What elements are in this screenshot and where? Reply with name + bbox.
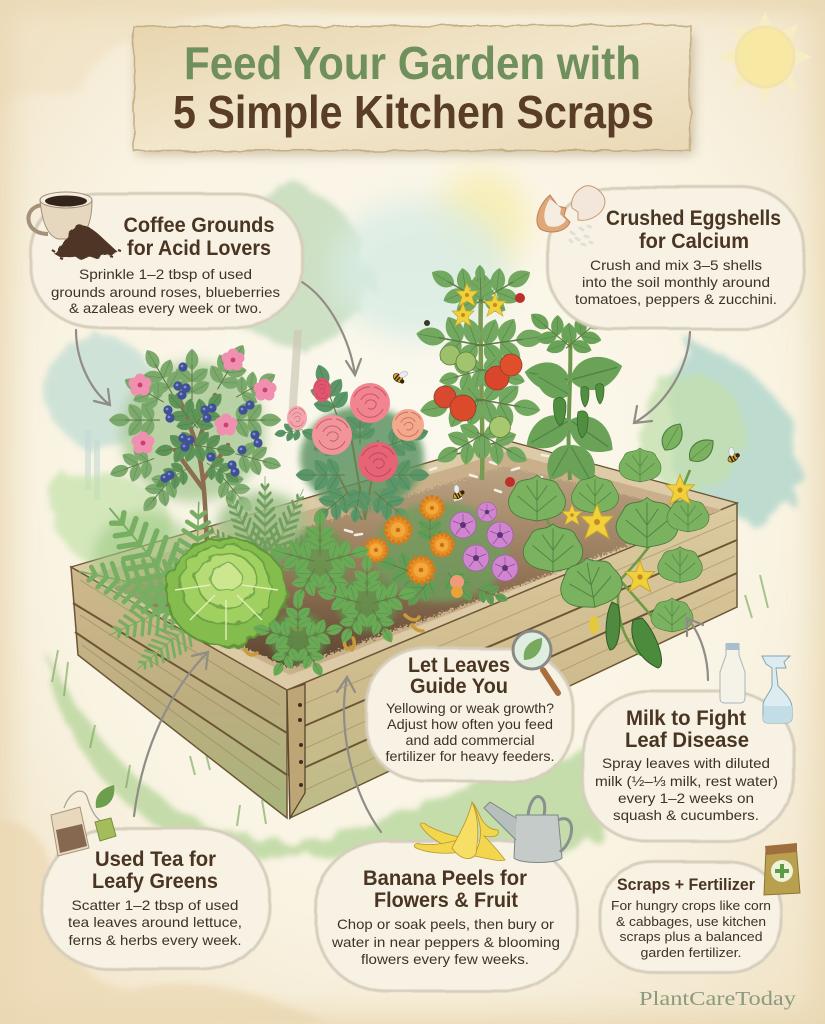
icon: magnifying glass bbox=[513, 631, 558, 693]
heading: banana peels: Banana Peels for bbox=[363, 867, 527, 890]
heading line two: Guide You bbox=[410, 675, 508, 698]
arrow: coffee to roses bbox=[302, 282, 361, 375]
sky glow bbox=[436, 170, 528, 270]
plant: marigolds and petunias bbox=[365, 497, 518, 615]
body: coffee grounds: Sprinkle 1–2 tbsp of used bbox=[79, 266, 252, 282]
body: banana peels bbox=[331, 916, 560, 967]
heading line two: Leaf Disease bbox=[625, 729, 749, 752]
body: banana peels: flowers every few weeks. bbox=[361, 951, 529, 967]
arrow: tea to lettuce bbox=[134, 652, 208, 816]
icon: spray bottle bbox=[762, 656, 792, 723]
bed left face bbox=[71, 567, 287, 818]
icon: watering can bbox=[484, 797, 572, 862]
plant: rose bush bbox=[273, 358, 434, 535]
heading: milk: Milk to Fight bbox=[626, 707, 746, 730]
icon: fertilizer bag bbox=[764, 843, 800, 895]
plant: cucumber vine bbox=[509, 420, 719, 668]
brand wordmark: PlantCareToday bbox=[639, 988, 796, 1010]
body: crushed eggshells bbox=[575, 257, 777, 307]
icon: milk bottle bbox=[720, 643, 745, 703]
body: coffee grounds bbox=[51, 266, 280, 316]
body: crushed eggshells: into the soil monthly around bbox=[582, 274, 770, 290]
body: scraps plus fertilizer: scraps plus a balanced bbox=[620, 929, 762, 944]
heading: scraps plus fertilizer: Scraps + Fertilizer bbox=[617, 875, 755, 894]
heading: crushed eggshells: Crushed Eggshells bbox=[606, 207, 781, 230]
plant: basil clusters bbox=[249, 509, 421, 683]
icon: coffee cup bbox=[28, 192, 121, 259]
title line two: 5 Simple Kitchen Scraps bbox=[173, 86, 654, 138]
body: scraps plus fertilizer bbox=[611, 898, 771, 960]
panel: scraps plus fertilizer bbox=[599, 843, 800, 973]
icon: banana peel bbox=[414, 802, 505, 861]
grass wash under bed bbox=[45, 575, 768, 857]
heading line two: Flowers & Fruit bbox=[374, 889, 518, 912]
body: banana peels: Chop or soak peels, then bury or bbox=[337, 916, 554, 932]
icon: sun bbox=[718, 12, 812, 102]
panel: crushed eggshells bbox=[537, 186, 804, 328]
body: let leaves bbox=[386, 700, 554, 764]
arrow: coffee to blueberry bbox=[76, 330, 110, 405]
watercolor background trees bbox=[49, 186, 800, 563]
panel: coffee grounds bbox=[28, 192, 303, 328]
panel: milk bbox=[582, 643, 793, 842]
body: scraps plus fertilizer: For hungry crops like corn bbox=[611, 898, 771, 913]
body: milk: every 1–2 weeks on bbox=[618, 790, 754, 806]
plant: blueberry and azalea tree bbox=[104, 335, 286, 545]
raised garden bed bbox=[71, 440, 737, 818]
plant: feathery herb bbox=[199, 477, 331, 578]
heading: used tea: Used Tea for bbox=[95, 848, 216, 871]
title line one: Feed Your Garden with bbox=[184, 37, 641, 89]
title banner bbox=[134, 25, 693, 154]
heading: coffee grounds: Coffee Grounds bbox=[124, 214, 274, 237]
heading line two: for Calcium bbox=[639, 230, 749, 253]
body: crushed eggshells: Crush and mix 3–5 shells bbox=[590, 257, 762, 273]
plant: pepper bbox=[518, 298, 626, 490]
body: let leaves: Yellowing or weak growth? bbox=[386, 700, 554, 716]
bed inner walls and soil bbox=[71, 440, 737, 690]
soil detail with eggshell and banana bits bbox=[245, 445, 554, 655]
heading: let leaves: Let Leaves bbox=[408, 654, 510, 677]
heading line two: Leafy Greens bbox=[92, 870, 218, 893]
body: let leaves: Adjust how often you feed bbox=[387, 716, 553, 732]
body: let leaves: and add commercial bbox=[406, 732, 534, 748]
body: coffee grounds: & azaleas every week or two. bbox=[69, 300, 262, 316]
heading line two: for Acid Lovers bbox=[127, 237, 271, 260]
body: milk bbox=[595, 755, 778, 823]
icon: eggshells bbox=[537, 186, 605, 245]
body: crushed eggshells: tomatoes, peppers & zucchini. bbox=[575, 291, 777, 307]
body: used tea bbox=[68, 897, 242, 948]
body: banana peels: water in near peppers & blooming bbox=[331, 934, 560, 950]
arrow: eggshells to pepper bbox=[634, 332, 690, 423]
body: milk: squash & cucumbers. bbox=[613, 807, 759, 823]
body: used tea: ferns & herbs every week. bbox=[68, 932, 242, 948]
arrow: banana to bed bbox=[337, 677, 381, 832]
plant: lettuce bbox=[166, 538, 286, 646]
plant: fern bbox=[74, 488, 225, 682]
icon: tea bag bbox=[51, 785, 116, 856]
body: used tea: Scatter 1–2 tbsp of used bbox=[72, 897, 238, 913]
bees and ladybugs bbox=[392, 293, 741, 500]
arrow: milk to cucumber bbox=[687, 618, 708, 680]
panel: used tea bbox=[41, 785, 269, 970]
body: used tea: tea leaves around lettuce, bbox=[68, 914, 242, 930]
bed right face bbox=[287, 503, 737, 818]
body: milk: milk (½–⅓ milk, rest water) bbox=[595, 773, 778, 789]
body: milk: Spray leaves with diluted bbox=[602, 755, 770, 771]
plant: tomato bbox=[411, 251, 548, 481]
body: scraps plus fertilizer: garden fertilizer. bbox=[640, 945, 742, 960]
body: coffee grounds: grounds around roses, blueberries bbox=[51, 284, 280, 300]
body: scraps plus fertilizer: & cabbages, use kitchen bbox=[616, 914, 766, 929]
body: let leaves: fertilizer for heavy feeders. bbox=[386, 748, 554, 764]
panel: banana peels bbox=[315, 797, 576, 991]
panel: let leaves guide you bbox=[366, 631, 571, 783]
